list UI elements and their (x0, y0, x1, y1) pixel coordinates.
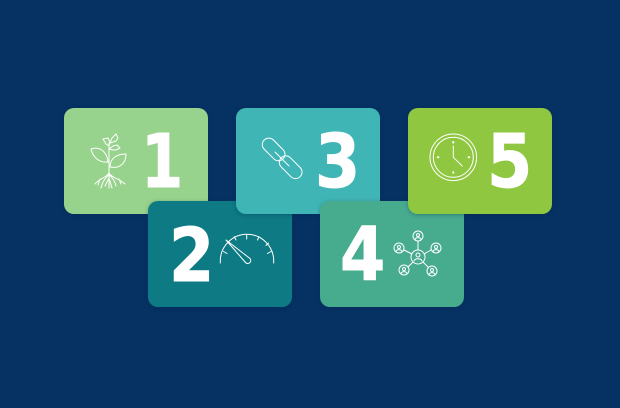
icon: people network (394, 231, 441, 276)
card 3: chain link (236, 108, 380, 214)
card 2: gauge (148, 201, 292, 307)
number 3: 3 (315, 119, 360, 205)
icon: gauge (220, 234, 274, 264)
icon: chain link (260, 135, 305, 181)
number 2: 2 (169, 213, 214, 299)
card 5: clock (408, 108, 552, 214)
card 4: network (320, 201, 464, 307)
icon: clock (430, 134, 477, 181)
card 1: plant (64, 108, 208, 214)
icon: plant (91, 134, 126, 188)
number 5: 5 (487, 119, 532, 205)
number 4: 4 (340, 212, 385, 298)
number 1: 1 (141, 118, 183, 204)
